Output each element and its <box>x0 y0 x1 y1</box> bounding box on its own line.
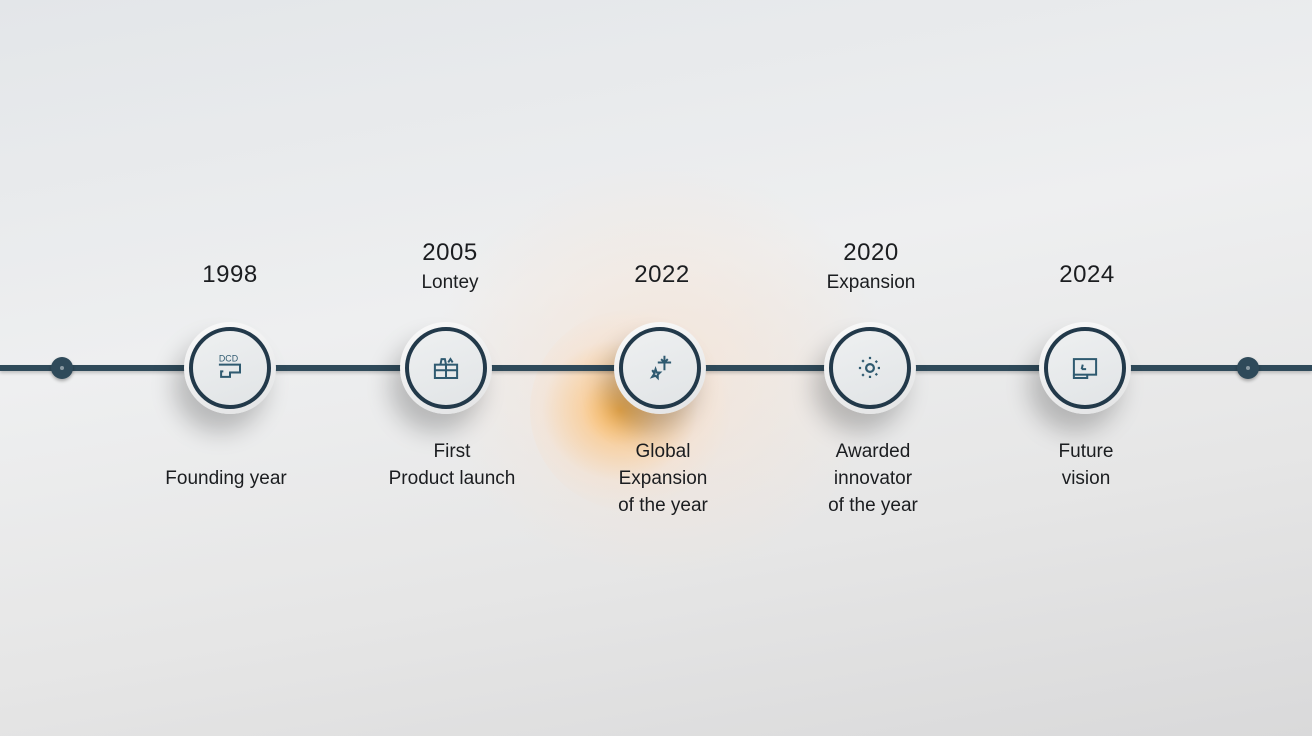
label: global expansion <box>618 441 708 516</box>
year 2022: 2022 <box>634 261 690 288</box>
year 2005 with subtitle <box>421 239 479 293</box>
year 2005 with subtitle: Lontey <box>421 272 479 293</box>
orange glow <box>530 310 730 510</box>
label: first product launch <box>389 441 515 489</box>
label: global expansion: Expansion <box>619 468 707 489</box>
end dot right <box>1237 357 1259 379</box>
label: awarded innovator: innovator <box>834 468 912 489</box>
end dot left <box>51 357 73 379</box>
label: awarded innovator: of the year <box>828 495 918 516</box>
node 2024 <box>1039 322 1131 414</box>
year 2020 with subtitle: Expansion <box>827 272 915 293</box>
node 1998 <box>184 322 276 414</box>
label: global expansion: Global <box>636 441 690 462</box>
node 2005 <box>400 322 492 414</box>
label: first product launch: Product launch <box>389 468 515 489</box>
year 2024: 2024 <box>1059 261 1115 288</box>
year 2005 with subtitle: 2005 <box>422 239 478 266</box>
label: global expansion: of the year <box>618 495 708 516</box>
label: future vision: vision <box>1062 468 1110 489</box>
year 2020 with subtitle: 2020 <box>843 239 899 266</box>
label: awarded innovator <box>828 441 918 516</box>
label: founding year: Founding year <box>165 468 287 489</box>
node 1998: DCD <box>219 353 238 363</box>
year 2020 with subtitle <box>827 239 915 293</box>
year 1998: 1998 <box>202 261 258 288</box>
label: first product launch: First <box>434 441 470 462</box>
timeline line <box>0 365 1312 371</box>
label: awarded innovator: Awarded <box>836 441 910 462</box>
node 2022 <box>614 322 706 414</box>
label: future vision: Future <box>1059 441 1113 462</box>
node 2020 <box>824 322 916 414</box>
label: future vision <box>1059 441 1113 489</box>
